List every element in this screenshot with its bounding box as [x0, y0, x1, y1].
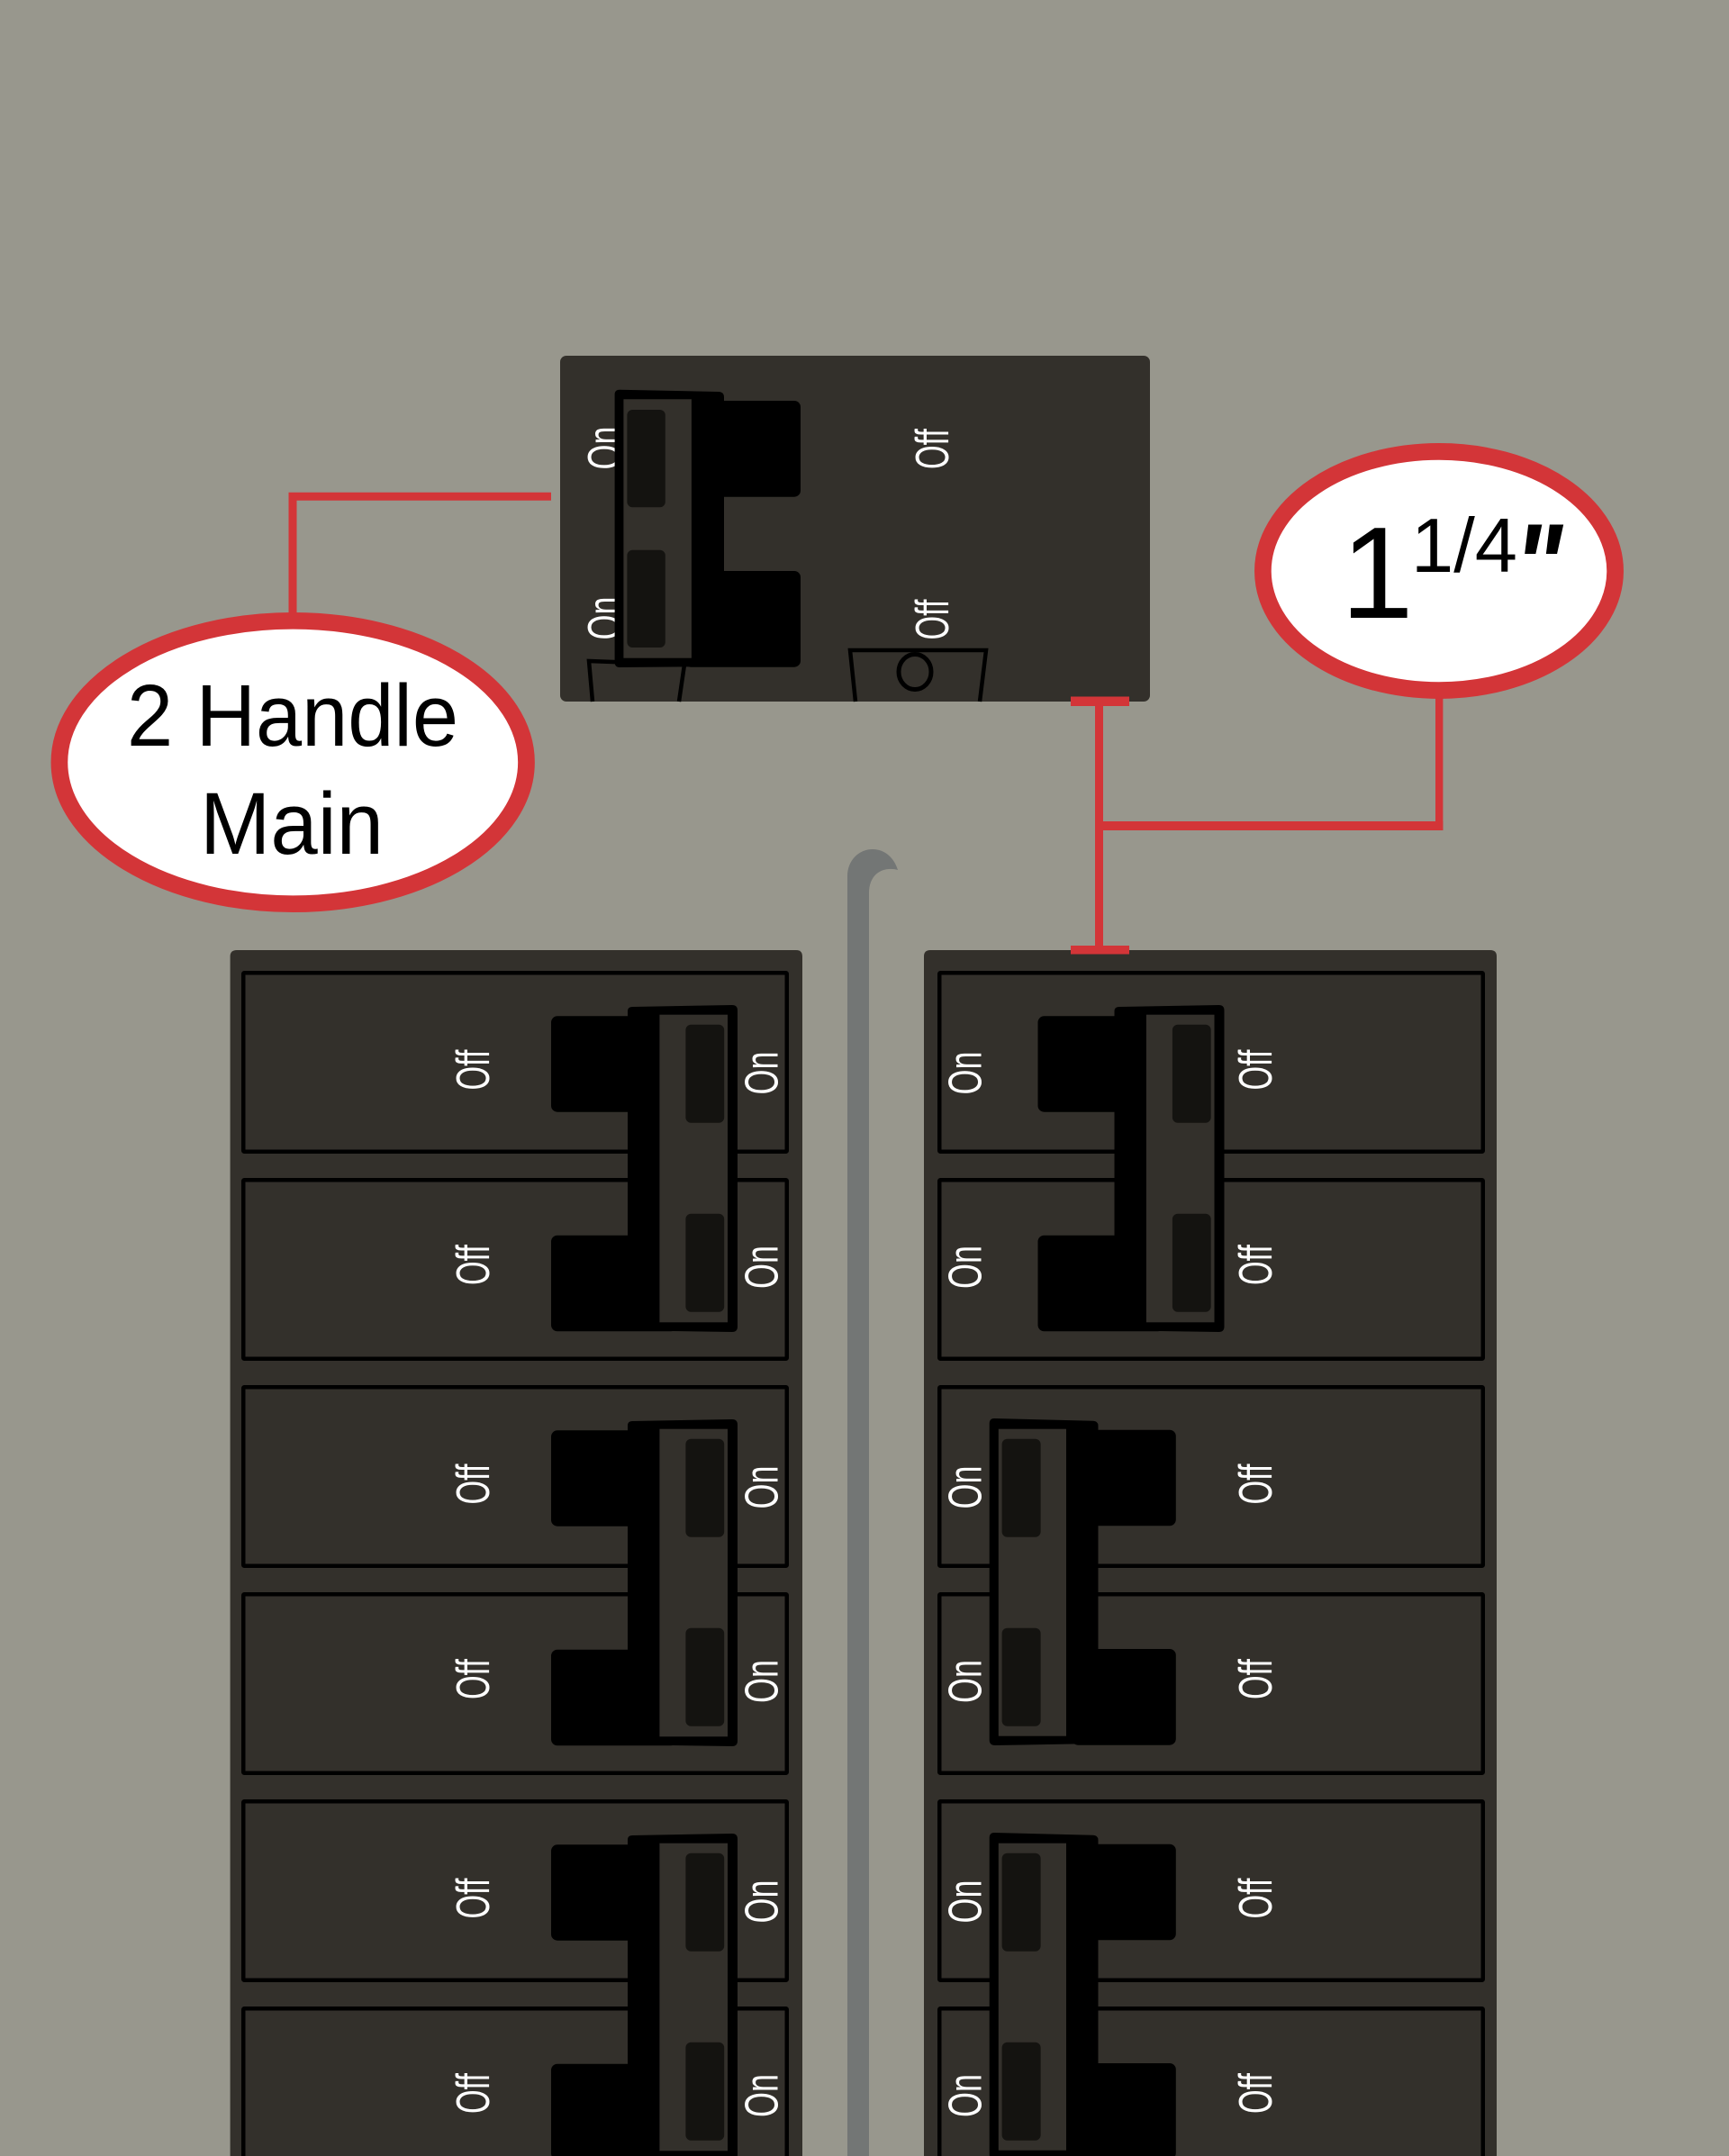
- left handle row 1: [551, 1005, 738, 1332]
- right On labels: On: [940, 1660, 992, 1703]
- callout fraction 1/4: 1/4: [1411, 503, 1517, 589]
- right handle row 2: [990, 1418, 1176, 1745]
- callout inch mark: ": [1514, 499, 1563, 630]
- main label: Off top: Off: [907, 429, 959, 469]
- dimension bracket: 1 1/4 inch gap: [1071, 693, 1443, 955]
- right Off labels: Off: [1230, 1659, 1282, 1699]
- left On labels: On: [737, 1660, 789, 1703]
- left Off labels: [448, 1049, 500, 2114]
- panel: main breaker: [560, 356, 1150, 702]
- main handle: [615, 390, 801, 667]
- right Off labels: Off: [1230, 1245, 1282, 1285]
- left Off labels: Off: [448, 2073, 500, 2114]
- callout: 2 Handle Main: [59, 621, 526, 904]
- left lock tab: [589, 661, 684, 702]
- panel: left breakers: [231, 950, 802, 2156]
- right On labels: [940, 1052, 992, 2117]
- right handle row 3: [990, 1833, 1176, 2156]
- right Off labels: [1230, 1049, 1282, 2114]
- left Off labels: Off: [448, 1245, 500, 1285]
- left On labels: On: [737, 1880, 789, 1924]
- callout: 1 1/4 inch: [1263, 451, 1616, 691]
- main label: On bottom: On: [579, 596, 631, 639]
- right On labels: On: [940, 1246, 992, 1289]
- left handle row 2: [551, 1419, 738, 1746]
- right On labels: On: [940, 1880, 992, 1924]
- main label: On top: On: [579, 427, 631, 470]
- left On labels: On: [737, 1466, 789, 1509]
- callout text line 2: Main: [200, 775, 384, 873]
- right On labels: On: [940, 1052, 992, 1095]
- right breaker slots: [939, 973, 1483, 2156]
- right Off labels: Off: [1230, 1463, 1282, 1504]
- right Off labels: Off: [1230, 1878, 1282, 1918]
- left breaker slots: [243, 973, 787, 2156]
- left On labels: On: [737, 1052, 789, 1095]
- left On labels: On: [737, 1246, 789, 1289]
- right On labels: On: [940, 2074, 992, 2117]
- right handle row 1: [1037, 1005, 1225, 1332]
- panel: right breakers: [924, 950, 1497, 2156]
- left Off labels: Off: [448, 1463, 500, 1504]
- left Off labels: Off: [448, 1049, 500, 1090]
- right lock tab: [850, 650, 986, 702]
- left Off labels: Off: [448, 1878, 500, 1918]
- left handle row 3: [551, 1834, 738, 2156]
- left Off labels: Off: [448, 1659, 500, 1699]
- callout number 1: 1: [1341, 500, 1414, 646]
- left On labels: [737, 1052, 789, 2117]
- main label: Off bottom: Off: [907, 599, 959, 639]
- left On labels: On: [737, 2074, 789, 2117]
- right Off labels: Off: [1230, 1049, 1282, 1090]
- right Off labels: Off: [1230, 2073, 1282, 2114]
- callout text line 1: 2 Handle: [127, 666, 458, 765]
- center rail: [847, 849, 898, 2156]
- leader line: 2 handle main: [293, 496, 551, 617]
- right On labels: On: [940, 1466, 992, 1509]
